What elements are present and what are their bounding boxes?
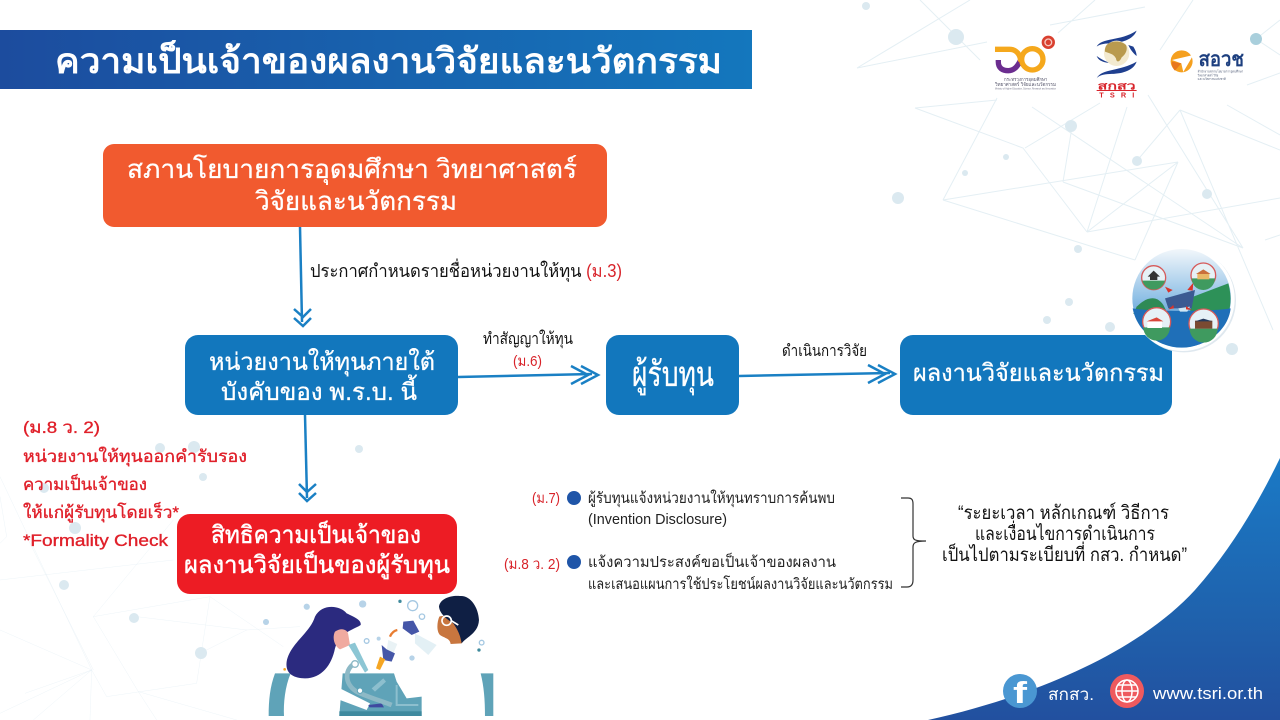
footer: facebook — [1003, 674, 1094, 710]
logo: PMU: สำนักงานสภานโยบายการอุดมศึกษา — [1198, 69, 1243, 75]
arrow: grantee to results — [739, 365, 895, 383]
box: policy council — [103, 144, 607, 227]
label: grant contract: (ม.6) — [513, 353, 542, 370]
red note: certificate of ownership: ความเป็นเจ้าของ — [23, 473, 147, 494]
list item: invention disclosure: (Invention Disclosure) — [588, 512, 727, 528]
label: announce funding agencies: ประกาศกำหนดรายชื่อหน่วยงานให้ทุน (ม.3) — [310, 258, 622, 282]
logo: ministry 60: วิทยาศาสตร์ วิจัยและนวัตกรรม — [995, 81, 1056, 88]
label: conduct research: ดำเนินการวิจัย — [782, 343, 867, 360]
box: grantee — [606, 335, 739, 415]
arrow: agency to ownership right — [299, 415, 316, 501]
box: ownership belongs to grantee — [177, 514, 457, 594]
box: funding agency: หน่วยงานให้ทุนภายใต้ — [209, 348, 435, 377]
icon: research circle illustration — [1131, 247, 1236, 352]
box: funding agency — [185, 335, 458, 415]
box: ownership belongs to grantee: ผลงานวิจัยเป็นของผู้รับทุน — [184, 550, 450, 580]
box: research results — [900, 335, 1172, 415]
list item: invention disclosure: ผู้รับทุนแจ้งหน่วยงานให้ทุนทราบการค้นพบ — [588, 489, 835, 508]
quote text: และเงื่อนไขการดำเนินการ — [975, 520, 1155, 545]
label: grant contract: ทำสัญญาให้ทุน — [483, 329, 573, 349]
red note: certificate of ownership — [23, 418, 247, 550]
arrow: agency to grantee — [458, 366, 598, 384]
box: funding agency: บังคับของ พ.ร.บ. นี้ — [221, 374, 417, 406]
red note: certificate of ownership: หน่วยงานให้ทุนออกคำรับรอง — [23, 446, 247, 467]
logo: ministry 60: Ministry of Higher Education, Science, Research and Innovation — [995, 87, 1056, 91]
footer: facebook: สกสว. — [1048, 685, 1094, 704]
red note: certificate of ownership: ให้แก่ผู้รับทุนโดยเร็ว* — [23, 501, 179, 523]
box: policy council: วิจัยและนวัตกรรม — [255, 186, 457, 216]
list item: intent to own results: และเสนอแผนการใช้ประโยชน์ผลงานวิจัยและนวัตกรรม — [588, 575, 893, 593]
list item: invention disclosure: (ม.7) — [532, 491, 560, 507]
logo: TSRI — [1097, 31, 1137, 100]
title: ความเป็นเจ้าของผลงานวิจัยและนวัตกรรม — [55, 39, 722, 81]
red note: certificate of ownership: *Formality Check — [23, 531, 169, 550]
illustration: two scientists with microscope — [263, 596, 493, 716]
bottom-right blue wave — [928, 458, 1280, 720]
list item: intent to own results: (ม.8 ว. 2) — [504, 557, 560, 573]
logo: ministry 60: กระทรวงการอุดมศึกษา — [1004, 77, 1048, 83]
logo: TSRI: TSRI — [1099, 91, 1134, 100]
footer: facebook: f — [1013, 675, 1028, 710]
box: research results: ผลงานวิจัยและนวัตกรรม — [913, 360, 1164, 387]
box: grantee: ผู้รับทุน — [632, 355, 714, 395]
logo: PMU: สอวช — [1199, 49, 1244, 71]
title banner — [0, 30, 752, 89]
list item: intent to own results: แจ้งความประสงค์ขอเป็นเจ้าของผลงาน — [588, 552, 836, 571]
footer: website — [1110, 674, 1263, 708]
box: policy council: สภานโยบายการอุดมศึกษา วิทยาศาสตร์ — [127, 154, 577, 185]
logo: ministry 60 — [995, 36, 1056, 91]
logo: PMU — [1171, 49, 1244, 81]
quote text — [942, 502, 1187, 566]
label: grant contract — [483, 329, 573, 370]
red note: certificate of ownership: (ม.8 ว. 2) — [23, 418, 100, 437]
list item: intent to own results — [504, 552, 893, 593]
logo: PMU: และนวัตกรรมแห่งชาติ — [1198, 77, 1226, 81]
arrow: council to funding agency — [294, 227, 311, 326]
quote text: เป็นไปตามระเบียบที่ กสว. กำหนด” — [942, 541, 1187, 566]
footer: website: www.tsri.or.th — [1152, 684, 1263, 703]
box: ownership belongs to grantee: สิทธิความเป็นเจ้าของ — [211, 520, 421, 549]
logo: PMU: วิทยาศาสตร์ วิจัย — [1198, 73, 1218, 77]
list item: invention disclosure — [532, 489, 835, 528]
brace — [901, 498, 926, 587]
quote text: “ระยะเวลา หลักเกณฑ์ วิธีการ — [958, 502, 1169, 524]
logo: TSRI: สกสว — [1098, 81, 1136, 92]
